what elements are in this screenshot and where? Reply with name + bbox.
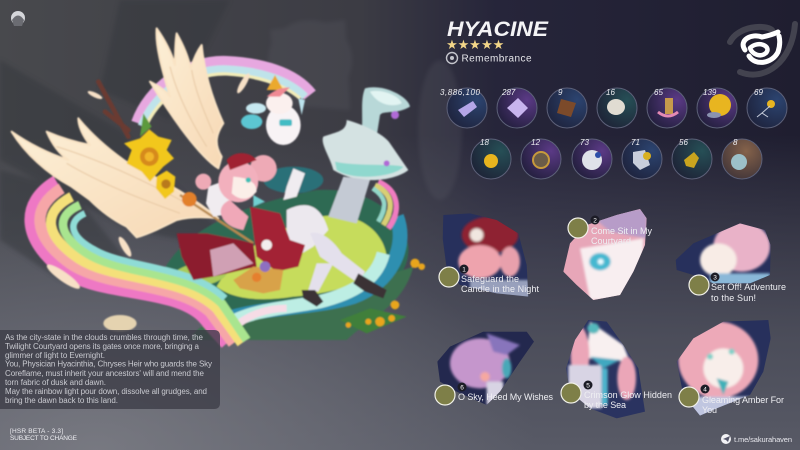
- eidolon 3: Set Off! Adventure: [711, 282, 786, 292]
- girl: head and hair: [195, 153, 277, 230]
- flower at blurb: [103, 315, 137, 332]
- rarity stars: ★: [493, 37, 504, 52]
- eidolon 1: 1: [462, 266, 466, 274]
- sunflower: [124, 113, 197, 207]
- fountain: [323, 87, 410, 223]
- material: orb: [722, 139, 762, 179]
- lower wing: [12, 118, 218, 237]
- eidolon 2: [568, 216, 652, 246]
- staff twigs: [98, 82, 128, 137]
- eidolon 5: 5: [586, 382, 590, 390]
- material counts: 12: [531, 138, 540, 147]
- eidolon 5: Crimson Glow Hidden: [584, 390, 672, 400]
- eidolon 2: Courtyard: [591, 236, 631, 246]
- eidolon 1: Safeguard the: [461, 274, 519, 284]
- logo: top-left avatar mark: [11, 11, 25, 26]
- story blurb panel: May the rainbow light pour down, dissolve all grudges, and: [5, 387, 207, 396]
- eidolon 2: Come Sit in My: [591, 226, 652, 236]
- story blurb panel: Twilight Courtyard opens its gates once more, bringing a: [5, 342, 200, 351]
- panel art 5: [563, 318, 647, 420]
- material counts: 8: [733, 138, 738, 147]
- island: [157, 167, 413, 340]
- material counts: 287: [501, 88, 516, 97]
- rainbow: upper arc: [138, 63, 310, 128]
- rarity stars: ★: [458, 37, 469, 52]
- eidolon 6: O Sky, Heed My Wishes: [458, 392, 554, 402]
- eidolon 6: 6: [460, 384, 464, 392]
- beta disclaimer: SUBJECT TO CHANGE: [10, 435, 78, 442]
- eidolon art panels: [435, 208, 773, 420]
- material counts: 16: [606, 88, 615, 97]
- rarity stars: [446, 37, 504, 52]
- story blurb panel: You, Physician Hyacinthia, Chryses Heir who guards the Sky: [5, 360, 212, 368]
- material: white fabric: [597, 88, 637, 128]
- staff: [180, 195, 253, 243]
- material: sprout: [747, 88, 787, 128]
- materials row 1: [447, 88, 787, 128]
- material: credits: [447, 88, 487, 128]
- material counts: 69: [754, 88, 763, 97]
- material: cube: [497, 88, 537, 128]
- story blurb panel: Coreflame, must inherit your ancestors' will and mend the: [5, 369, 205, 378]
- material counts: 3,886,100: [440, 88, 481, 97]
- beta disclaimer: [HSR BETA - 3.3]: [10, 428, 63, 435]
- story blurb panel: glimmer of light to Evernight.: [5, 351, 105, 360]
- material: ring: [521, 139, 561, 179]
- material: blue gold shard: [622, 139, 662, 179]
- element icon: imaginary swirl: [730, 24, 795, 75]
- story blurb panel: As the city-state in the clouds crumbles through time, the: [5, 333, 204, 342]
- material: book: [547, 88, 587, 128]
- rainbow: right arc: [373, 182, 396, 228]
- material counts: 9: [558, 88, 563, 97]
- rarity stars: ★: [469, 37, 481, 52]
- material: golden bloom: [697, 88, 737, 128]
- eidolon 4: You: [702, 405, 717, 415]
- eidolon 3: 3: [713, 274, 717, 282]
- material counts: 73: [580, 138, 589, 147]
- eidolon 4: Gleaming Amber For: [702, 395, 784, 405]
- eidolon 3: [689, 272, 786, 303]
- telegram link: t.me/sakurahaven: [734, 435, 792, 444]
- story blurb panel: bring the dawn back to this land.: [5, 396, 118, 405]
- material counts: 71: [631, 138, 640, 147]
- material counts: 139: [703, 88, 717, 97]
- panel art 6: [435, 330, 535, 407]
- path: Remembrance: Remembrance: [462, 54, 532, 64]
- eidolon 1: [439, 264, 539, 294]
- material: gold coin: [471, 139, 511, 179]
- eidolon 3: to the Sun!: [711, 293, 756, 303]
- panel art 3: [673, 222, 773, 285]
- beta disclaimer: [10, 428, 78, 442]
- girl: sleeves: [206, 168, 305, 217]
- material: yellow black shard: [672, 139, 712, 179]
- eidolon 6: [435, 382, 554, 405]
- material counts: 56: [679, 138, 688, 147]
- stream: [223, 217, 400, 340]
- rarity stars: ★: [446, 37, 458, 52]
- character artwork: [12, 28, 425, 343]
- panel art 1: [440, 212, 530, 298]
- eidolon 4: 4: [703, 386, 707, 394]
- yellow flowers right: [340, 259, 425, 333]
- rarity stars: ★: [481, 37, 493, 52]
- wing feather lines: [57, 67, 213, 213]
- feathers: [44, 72, 252, 292]
- eidolon 5: [561, 380, 672, 410]
- material counts: 65: [654, 88, 663, 97]
- eidolon 4: [679, 384, 784, 415]
- title: HYACINE: [447, 18, 549, 41]
- material: pink ribbon hourglass: [647, 88, 687, 128]
- eidolon 1: Candle in the Night: [461, 284, 539, 294]
- materials row 2: [471, 139, 762, 179]
- girl: dress: [177, 205, 387, 307]
- panel art 4: [675, 318, 773, 418]
- material: porcelain blue: [572, 139, 612, 179]
- story blurb panel: torn fabric of dusk and dawn.: [5, 378, 106, 387]
- eidolon 5: by the Sea: [584, 400, 626, 410]
- unicorn: [241, 75, 305, 145]
- upper wing: [150, 28, 223, 168]
- eidolon 2: 2: [593, 218, 597, 224]
- story blurb panel: [0, 330, 220, 409]
- panel art 2: [562, 208, 648, 302]
- material counts: [440, 88, 763, 147]
- rainbow: main sweep: [31, 182, 247, 343]
- material counts: 18: [480, 138, 489, 147]
